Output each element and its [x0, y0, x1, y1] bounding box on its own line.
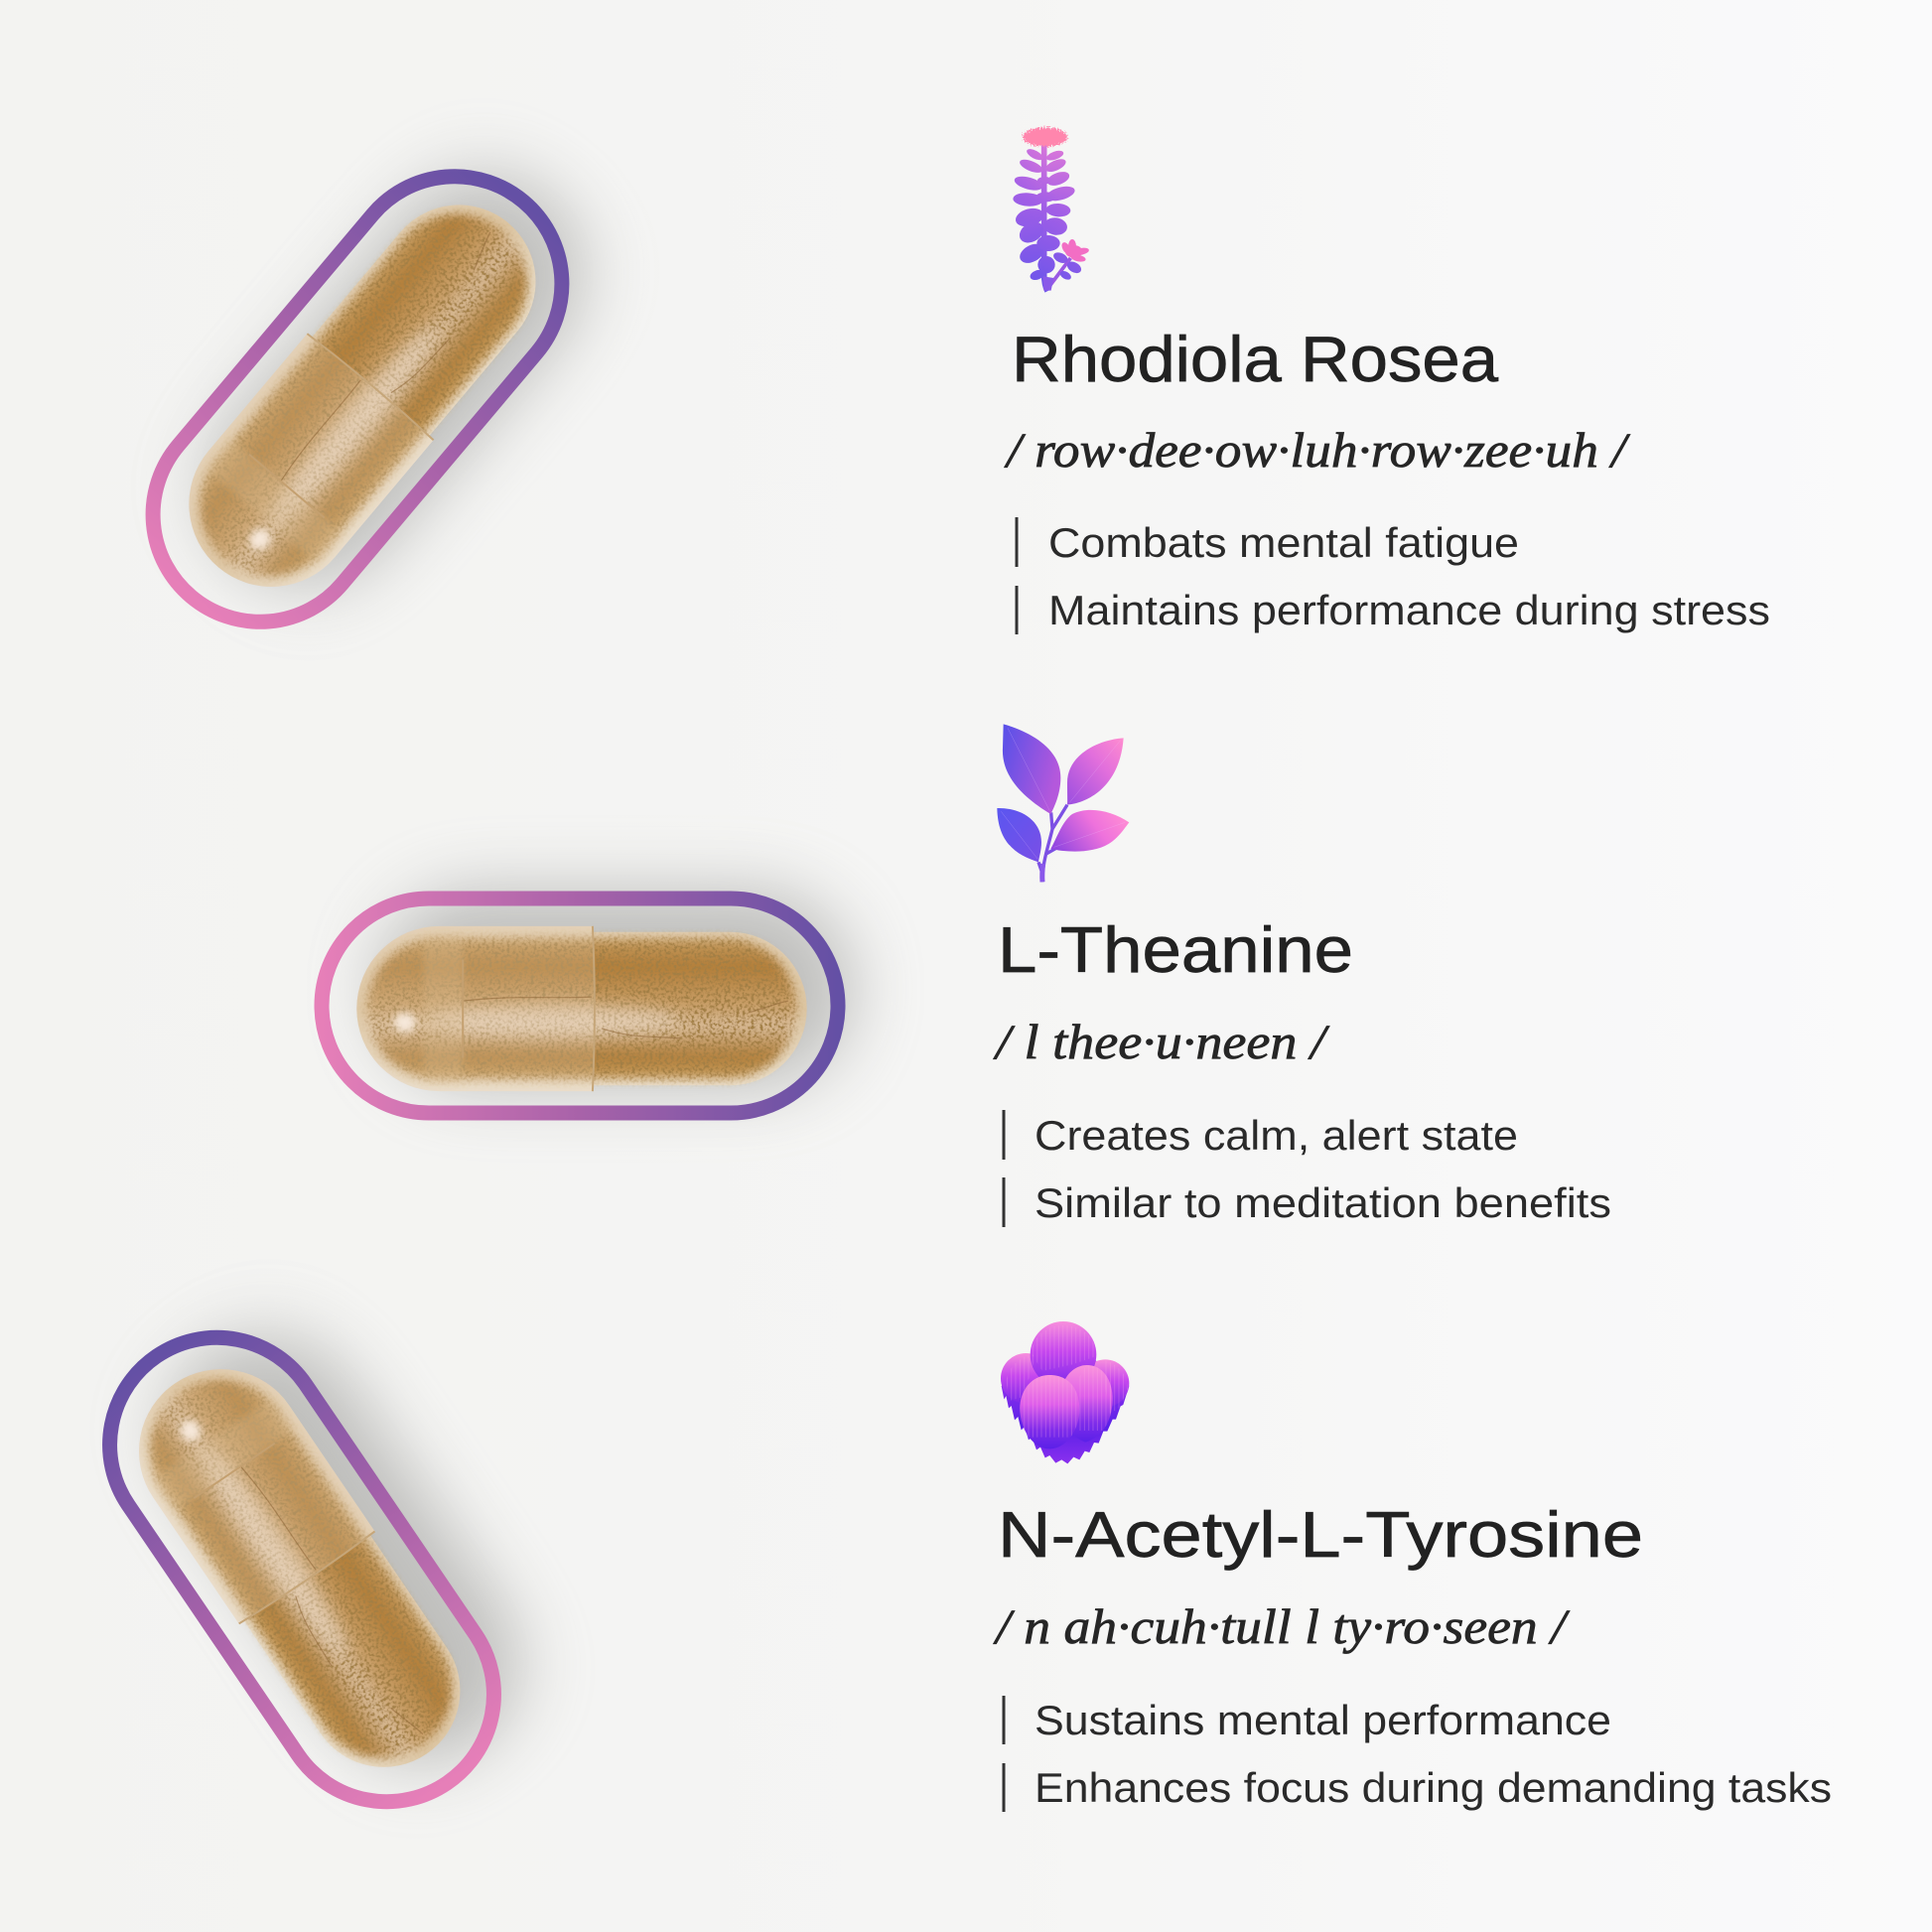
icon: rhodiola plant: [1013, 127, 1090, 291]
pronunciation: N-Acetyl-L-Tyrosine: / n ah·cuh·tull l ty·ro·seen /: [993, 1598, 1570, 1654]
pronunciation: L-Theanine: / l thee·u·neen /: [993, 1014, 1329, 1069]
benefits: N-Acetyl-L-Tyrosine: [1004, 1696, 1832, 1812]
icon: n-acetyl-l-tyrosine fuzzy cluster: [1001, 1321, 1129, 1463]
capsule 2 with gradient outline: [322, 890, 854, 1113]
benefits: Rhodiola Rosea: Combats mental fatigue: [1048, 519, 1519, 566]
benefits: N-Acetyl-L-Tyrosine: Enhances focus during demanding tasks: [1035, 1764, 1832, 1811]
benefits: Rhodiola Rosea: Maintains performance during stress: [1048, 587, 1770, 633]
small pink flower: [1060, 239, 1090, 263]
benefits: L-Theanine: Similar to meditation benefits: [1035, 1179, 1611, 1226]
benefits: L-Theanine: [1004, 1110, 1611, 1227]
capsule photo 2: [356, 926, 807, 1091]
title: L-Theanine: L-Theanine: [998, 913, 1353, 986]
gradient ring 3: [69, 1296, 535, 1844]
pink flower head: [1023, 127, 1067, 147]
shadow: capsule 2: [377, 890, 854, 1088]
benefits: N-Acetyl-L-Tyrosine: Sustains mental performance: [1035, 1697, 1611, 1743]
shadow: capsule 1: [166, 133, 624, 625]
gradient ring 2: [322, 898, 838, 1113]
title: Rhodiola Rosea: Rhodiola Rosea: [1012, 323, 1499, 395]
shadow: capsule 3: [126, 1296, 559, 1802]
benefits: L-Theanine: Creates calm, alert state: [1035, 1112, 1518, 1159]
capsule photo 1: [155, 170, 572, 621]
capsule photo 3: [107, 1337, 494, 1800]
benefits: Rhodiola Rosea: [1017, 517, 1770, 634]
pronunciation: Rhodiola Rosea: / row·dee·ow·luh·row·zee·uh /: [1004, 422, 1630, 478]
capsule 1 with gradient outline: [109, 133, 624, 665]
capsule 3 with gradient outline: [69, 1296, 559, 1844]
title: N-Acetyl-L-Tyrosine: N-Acetyl-L-Tyrosine: [998, 1498, 1643, 1571]
gradient ring 1: [109, 133, 606, 665]
icon: l-theanine tea leaves: [997, 724, 1129, 882]
